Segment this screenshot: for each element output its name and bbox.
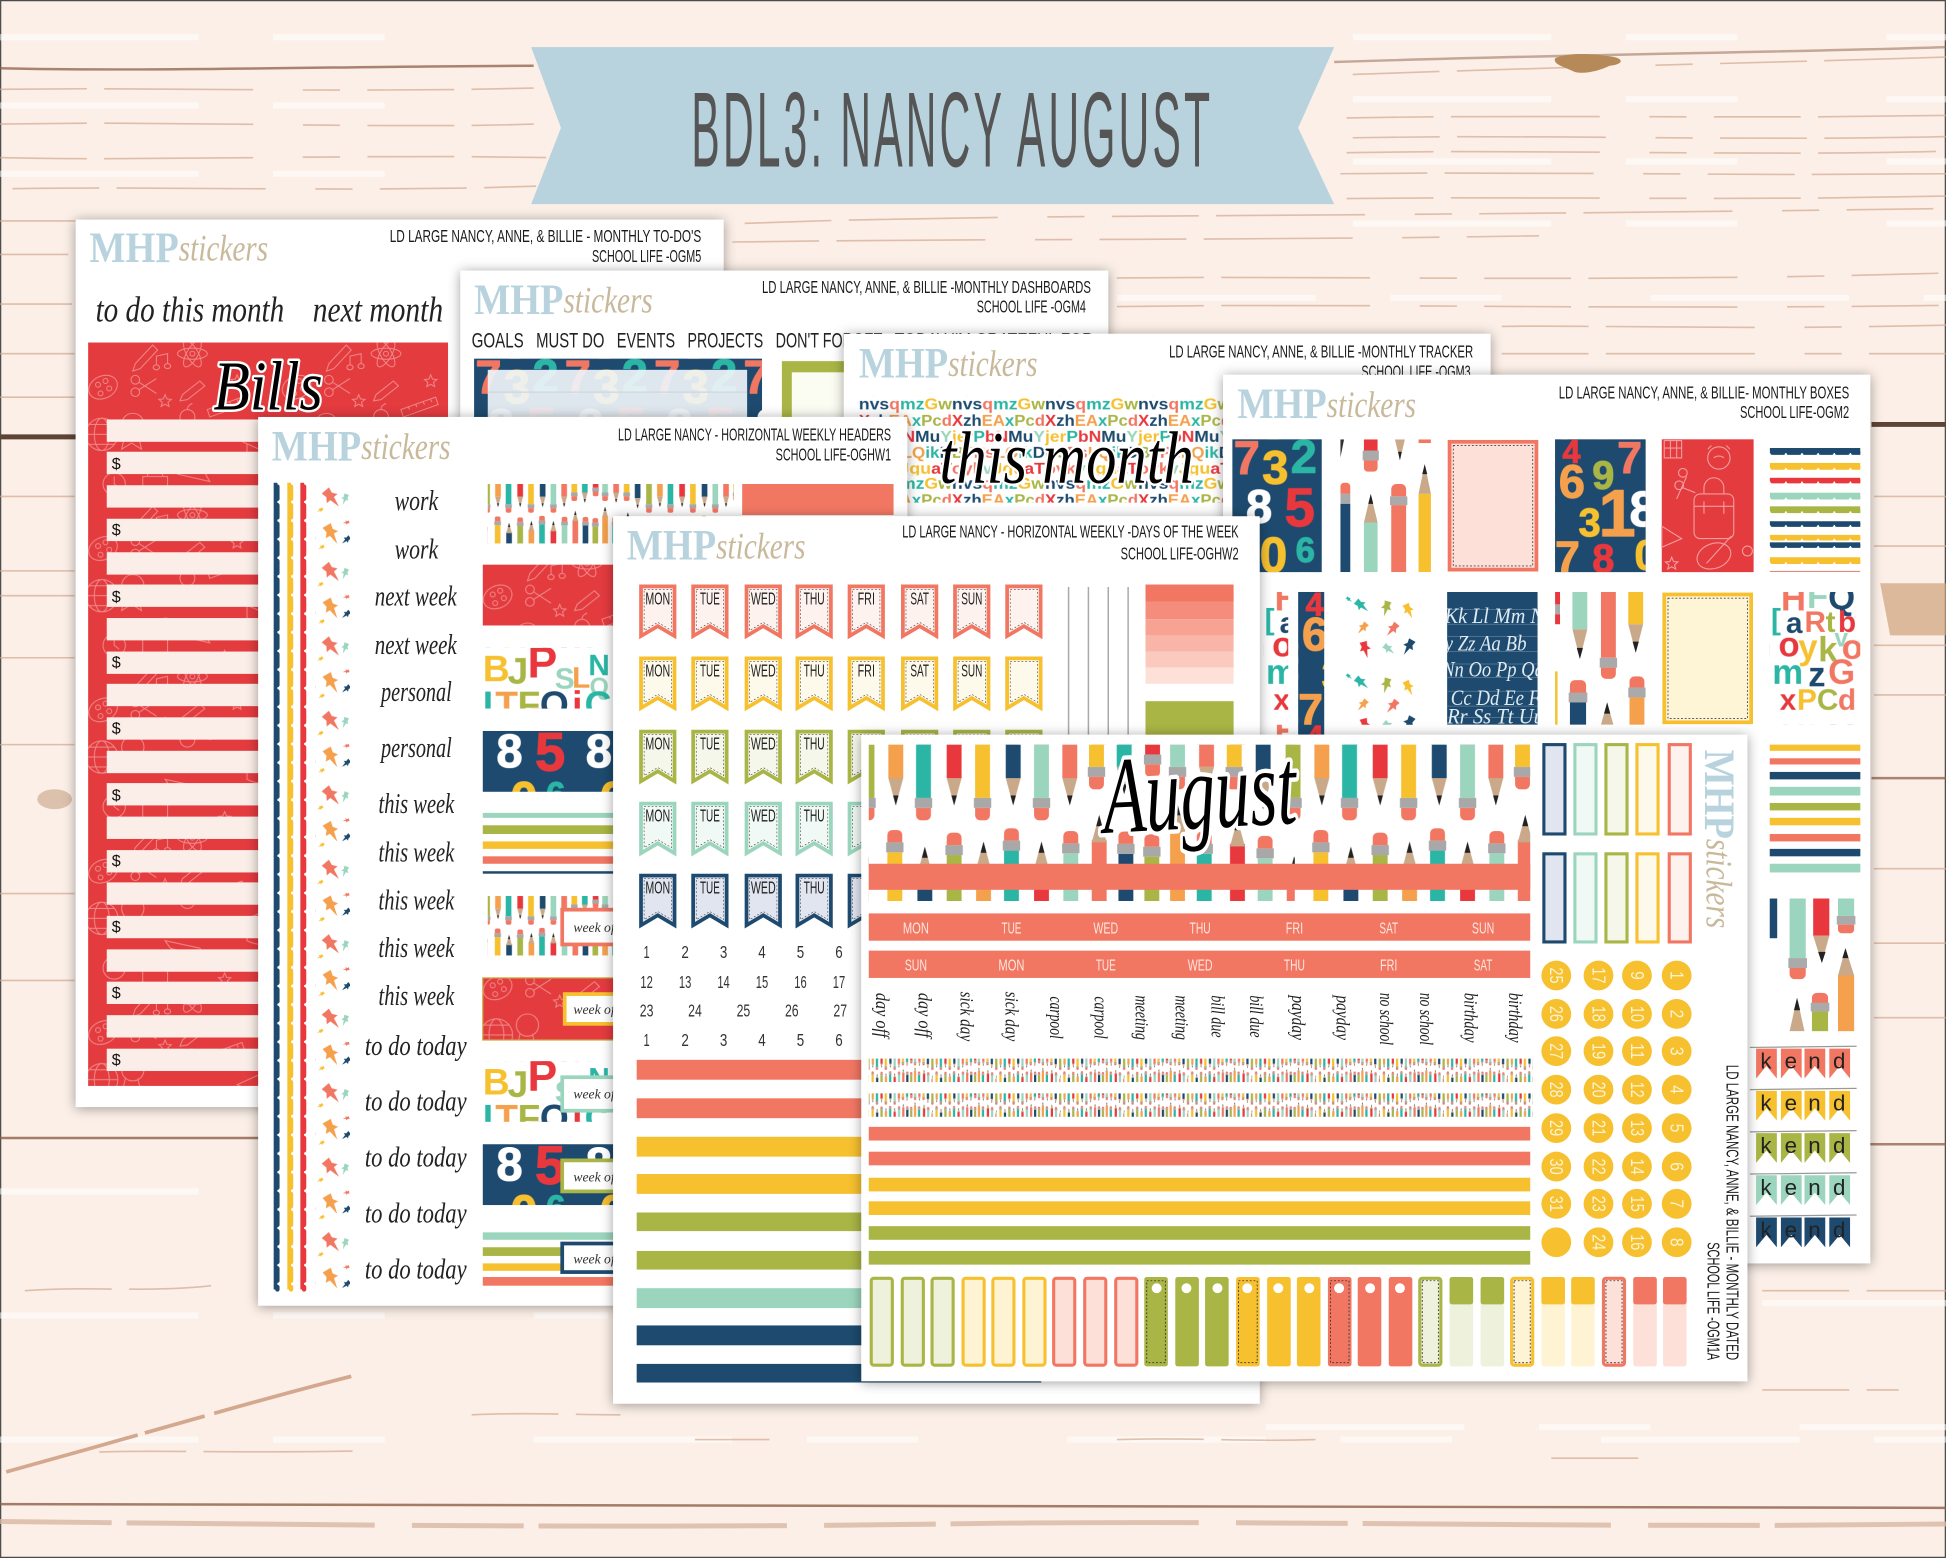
sheet: monthly dashboards: GOALS: [472, 329, 524, 352]
day flags coral row: WED: [751, 588, 776, 608]
date dots: 29: [1546, 1120, 1567, 1136]
date dots: 9: [1627, 971, 1648, 980]
rotated script words: birthday: [1459, 993, 1480, 1043]
day flags coral row: FRI: [858, 588, 875, 608]
script word stickers: to do today: [365, 1254, 467, 1285]
weekday bar monday start: WED: [1093, 919, 1118, 937]
weekend banners: e: [1785, 1175, 1797, 1200]
script word stickers: this week: [379, 789, 455, 820]
day flags navy row: THU: [804, 878, 825, 898]
date numbers: 15: [756, 972, 768, 992]
date numbers: 25: [737, 1000, 750, 1020]
pencil banner: [869, 745, 1530, 901]
day flags navy row: MON: [645, 878, 670, 898]
tile: navy numbers: [1232, 439, 1322, 572]
tile: alphabet strip and navy numbers strip: [1263, 592, 1324, 735]
script word stickers: next week: [375, 630, 458, 661]
pencil header with week-of label: [488, 896, 625, 955]
sheet: days of the week: LD LARGE NANCY - HORIZONTAL WEEKLY -DAYS OF THE WEEK: [902, 521, 1239, 541]
weekend banners: n: [1808, 1175, 1821, 1200]
sheet: monthly dashboards: stickers: [563, 281, 653, 322]
script word stickers: this week: [379, 886, 455, 917]
sheet: monthly tracker: [844, 334, 1491, 532]
sheet: days of the week: MHP: [627, 522, 716, 570]
weekday bar sunday start: THU: [1284, 956, 1305, 974]
weekend banners: k: [1760, 1049, 1772, 1074]
alphabet header with week-of label: week of: [573, 1086, 617, 1101]
sheet: monthly dashboards: LD LARGE NANCY, ANNE, & BILLIE -MONTHLY DASHBOARDS: [762, 277, 1091, 297]
date dots: 19: [1588, 1043, 1609, 1059]
date dots: 10: [1627, 1006, 1648, 1022]
rotated script words: no school: [1415, 993, 1436, 1045]
sheet: monthly boxes: stickers: [1327, 385, 1416, 426]
day flags coral row: MON: [645, 588, 670, 608]
date numbers: 2: [681, 942, 689, 962]
stripes header: [483, 813, 619, 874]
weekday bar sunday start: TUE: [1096, 956, 1116, 974]
sheet: monthly tracker: SCHOOL LIFE -OGM3: [1361, 361, 1471, 381]
sheet: weekly headers: [258, 417, 907, 1306]
date numbers: 4: [758, 942, 766, 962]
day flags yellow row: [641, 658, 1041, 708]
title ribbon banner: [531, 47, 1334, 204]
title text: BDL3: NANCY AUGUST: [691, 70, 1210, 190]
date dots: 3: [1666, 1047, 1687, 1056]
weekend banners: e: [1785, 1091, 1797, 1116]
mini pencil washi strips: [869, 1059, 1533, 1117]
date dots: 22: [1588, 1159, 1609, 1175]
script word stickers: personal: [380, 677, 452, 708]
script word stickers: this week: [379, 981, 455, 1012]
weekday bar sunday start: WED: [1188, 956, 1213, 974]
rotated script words: sick day: [1000, 992, 1021, 1042]
tile: pencils two: [1555, 592, 1646, 725]
month script: August: [1096, 726, 1301, 857]
sheet: monthly tracker: MHP: [859, 339, 948, 387]
weekday bar monday start: SUN: [1472, 919, 1494, 937]
sheet: monthly to-do's: $: [112, 455, 121, 473]
day flags olive row: THU: [804, 734, 825, 754]
colour stripes: [869, 1127, 1530, 1265]
date numbers: 6: [835, 1030, 843, 1050]
sheet: monthly to-do's: $: [112, 719, 121, 737]
day flags navy row: [641, 876, 883, 925]
weekend banners: n: [1808, 1217, 1821, 1242]
day flags coral row: THU: [804, 588, 825, 608]
weekend banners: n: [1808, 1091, 1821, 1116]
sheet: monthly tracker: LD LARGE NANCY, ANNE, & BILLIE -MONTHLY TRACKER: [1169, 341, 1473, 361]
weekend banners: k: [1760, 1133, 1772, 1158]
date dots: 2: [1666, 1010, 1687, 1018]
wide stripes: [637, 1060, 1041, 1383]
script word stickers: work: [395, 534, 439, 565]
date numbers: 26: [785, 1000, 799, 1020]
date dots: 26: [1546, 1006, 1567, 1022]
push pin strip: [315, 483, 350, 1289]
date numbers: 1: [644, 942, 650, 962]
weekend banners: d: [1833, 1091, 1845, 1116]
rotated logo: [1695, 750, 1743, 928]
alphabet header with week-of label: [483, 1061, 624, 1122]
rotated script words: day off: [913, 993, 934, 1040]
script word stickers: personal: [380, 733, 452, 764]
date numbers: 13: [679, 972, 691, 992]
date dots: 30: [1546, 1159, 1567, 1175]
sheet: weekly headers: SCHOOL LIFE-OGHW1: [776, 444, 891, 464]
rotated sheet title: [1704, 1065, 1742, 1360]
date dots: 18: [1588, 1006, 1609, 1022]
weekday bar monday start: SAT: [1379, 919, 1398, 937]
rotated logo: stickers: [1697, 839, 1738, 928]
sheet: monthly to-do's: $: [112, 984, 121, 1002]
rotated script words: [871, 992, 1525, 1045]
rotated script words: birthday: [1504, 993, 1525, 1043]
rotated script words: payday: [1287, 994, 1308, 1041]
weekend banners: d: [1833, 1175, 1845, 1200]
date dots: 16: [1627, 1234, 1648, 1250]
date dots: 1: [1666, 971, 1687, 980]
tile: cursive on navy: [1441, 592, 1545, 729]
weekend banners: e: [1785, 1217, 1797, 1242]
rotated script words: meeting: [1170, 995, 1191, 1040]
sheet: monthly to-do's: SCHOOL LIFE -OGM5: [592, 246, 701, 266]
sheet: monthly dashboards: PROJECTS: [688, 329, 763, 352]
weekday bar monday start: THU: [1190, 919, 1211, 937]
coral header: [742, 484, 894, 515]
date dots: 23: [1588, 1196, 1609, 1212]
script word stickers: work: [395, 486, 439, 517]
red header with week-of label: [483, 978, 627, 1040]
day flags olive row: TUE: [700, 734, 720, 754]
script word stickers: to do today: [365, 1198, 467, 1229]
sheet: monthly dashboards: MUST DO: [536, 329, 604, 352]
date numbers: 23: [640, 1000, 653, 1020]
stripes stack: [1770, 745, 1860, 872]
day flags yellow row: SUN: [961, 660, 982, 680]
date dots: 5: [1666, 1124, 1687, 1132]
tile: navy numbers two: [1555, 439, 1646, 572]
weekday bar monday start: FRI: [1286, 919, 1303, 937]
date dots: 12: [1627, 1082, 1648, 1098]
sheet: monthly tracker: this month: [939, 418, 1194, 500]
navy header with week-of label: week of: [573, 1169, 617, 1184]
coral title bar: [869, 864, 1530, 890]
sheet: monthly dashboards: EVENTS: [617, 329, 675, 352]
bottom box stickers: [871, 1277, 1687, 1366]
weekend banners: n: [1808, 1049, 1821, 1074]
weekend banners: e: [1785, 1133, 1797, 1158]
navy header with week-of label: [483, 1144, 624, 1205]
sheet: monthly boxes: [1223, 375, 1870, 1263]
sheet: monthly to-do's: $: [112, 852, 121, 870]
sheet: days of the week: [613, 516, 1260, 1404]
sheet: monthly to-do's: [76, 220, 724, 1107]
weekend banners: k: [1760, 1091, 1772, 1116]
date numbers: 6: [835, 942, 843, 962]
day flags coral row: TUE: [700, 588, 720, 608]
rotated script words: carpool: [1090, 997, 1111, 1039]
date numbers: 5: [797, 942, 804, 962]
tile: push pins: [1340, 592, 1431, 725]
sheet: weekly headers: stickers: [361, 427, 451, 468]
weekend banners: k: [1760, 1175, 1772, 1200]
rotated script words: sick day: [956, 992, 977, 1042]
sheet: monthly to-do's: to do this month: [96, 289, 284, 329]
sheet: weekly headers: MHP: [272, 422, 361, 470]
day flags navy row: WED: [751, 878, 776, 898]
tile: coral frame: [1450, 442, 1536, 570]
date numbers: 16: [794, 972, 807, 992]
date dots: 17: [1588, 967, 1609, 984]
date dots: 21: [1588, 1120, 1609, 1136]
weekday bar monday start: TUE: [1002, 919, 1022, 937]
script word stickers: next week: [375, 582, 458, 613]
day flags mint row: [641, 804, 883, 853]
date dots: 27: [1546, 1043, 1567, 1059]
script word stickers: to do today: [365, 1143, 467, 1174]
date dots: 14: [1627, 1159, 1648, 1175]
date numbers: [640, 942, 847, 1050]
sheet: monthly to-do's: next month: [313, 289, 443, 329]
day flags navy row: TUE: [700, 878, 720, 898]
day flags coral row: SUN: [961, 588, 982, 608]
weekday bar sunday start: FRI: [1380, 956, 1397, 974]
sheet: monthly to-do's: $: [112, 918, 121, 936]
stripes header with week-of label: [483, 1232, 624, 1286]
weekday bar monday start: [869, 913, 1530, 941]
sheet: monthly dashboards: TODAY I'M GRATEFUL FOR: [895, 329, 1093, 352]
date numbers: 1: [644, 1030, 650, 1050]
stripes header with week-of label: week of: [573, 1251, 617, 1266]
date dots: 4: [1666, 1085, 1687, 1094]
date numbers: 5: [797, 1030, 804, 1050]
tile: scallop stripes: [1770, 448, 1860, 572]
date dots: 20: [1588, 1082, 1609, 1098]
day flags yellow row: MON: [645, 660, 670, 680]
day flags yellow row: FRI: [858, 660, 875, 680]
rotated script words: payday: [1332, 994, 1353, 1041]
pencils small tile: [1770, 898, 1856, 1032]
date dots: 24: [1588, 1234, 1609, 1250]
date dots: 28: [1546, 1082, 1567, 1098]
day flags mint row: WED: [751, 806, 776, 826]
date dots: 6: [1666, 1162, 1687, 1171]
date dots: 15: [1627, 1196, 1648, 1212]
date numbers: 12: [640, 972, 653, 992]
red header: [483, 565, 619, 625]
rotated script words: day off: [871, 993, 892, 1040]
tile: cursive on navy: y Zz Aa Bb: [1443, 630, 1527, 655]
weekday bar sunday start: MON: [998, 956, 1025, 974]
olive block: [1146, 701, 1234, 738]
tile: large pencils: [1340, 439, 1431, 572]
date dots: 8: [1666, 1238, 1687, 1247]
sheet: monthly to-do's: $: [112, 521, 121, 539]
day flags mint row: TUE: [700, 806, 720, 826]
weekend banners: d: [1833, 1133, 1845, 1158]
date numbers: 3: [720, 942, 727, 962]
date numbers: 17: [833, 972, 845, 992]
weekday bar monday start: MON: [903, 919, 929, 937]
day flags yellow row: WED: [751, 660, 776, 680]
day flags coral row: SAT: [910, 588, 929, 608]
sheet: monthly boxes: MHP: [1237, 380, 1327, 428]
date dots: [1541, 961, 1692, 1257]
tile: alphabet: [1770, 592, 1860, 725]
sheet: monthly to-do's: Bills: [213, 349, 323, 426]
day flags mint row: THU: [804, 806, 825, 826]
sheet: days of the week: stickers: [716, 526, 805, 567]
rotated sheet title: SCHOOL LIFE -OGM1A: [1704, 1242, 1724, 1360]
weekend banners: d: [1833, 1217, 1845, 1242]
date dots: 11: [1627, 1043, 1648, 1059]
sheet: monthly dated: [861, 726, 1747, 1381]
date numbers: 4: [758, 1030, 766, 1050]
script word stickers: to do today: [365, 1031, 467, 1062]
sheet: weekly headers: LD LARGE NANCY - HORIZONTAL WEEKLY HEADERS: [618, 425, 891, 445]
date numbers: 14: [717, 972, 730, 992]
day flags yellow row: THU: [804, 660, 825, 680]
day flags coral row: [641, 586, 1041, 636]
day flags olive row: [641, 732, 1041, 781]
rotated script words: bill due: [1206, 995, 1227, 1038]
sheet: monthly tracker: stickers: [948, 344, 1038, 385]
sheet: monthly dashboards: DON'T FORGET: [776, 329, 882, 352]
vertical grey lines: [1069, 587, 1128, 735]
sheet: monthly to-do's: $: [112, 654, 121, 672]
date numbers: 24: [688, 1000, 702, 1020]
tile: red doodles: [1662, 439, 1754, 574]
sheet: monthly dashboards: SCHOOL LIFE -OGM4: [977, 297, 1086, 317]
pencil header: [488, 484, 734, 543]
scalloped borders: [274, 483, 304, 1289]
rotated script words: no school: [1375, 993, 1396, 1045]
weekend banners: e: [1785, 1049, 1797, 1074]
alphabet header: [483, 648, 619, 709]
script word stickers: this week: [379, 837, 455, 868]
date dots: 31: [1546, 1196, 1567, 1212]
weekend banners: k: [1760, 1217, 1772, 1242]
coral gradient block: [1146, 585, 1234, 684]
script word stickers: this week: [379, 933, 455, 964]
date numbers: 2: [681, 1030, 689, 1050]
sheet: monthly dashboards: [460, 271, 1108, 767]
day flags yellow row: TUE: [700, 660, 720, 680]
day flags yellow row: SAT: [910, 660, 929, 680]
sheet: monthly boxes: SCHOOL LIFE-OGM2: [1740, 402, 1849, 422]
rotated script words: bill due: [1245, 995, 1266, 1038]
day flags olive row: WED: [751, 734, 776, 754]
weekday bar sunday start: SUN: [905, 956, 927, 974]
sheet: monthly dashboards: MHP: [474, 276, 563, 324]
red header with week-of label: week of: [573, 1002, 617, 1017]
weekday bar sunday start: SAT: [1474, 956, 1492, 974]
sheet: monthly to-do's: $: [112, 1051, 121, 1069]
rotated script words: carpool: [1045, 997, 1066, 1039]
sheet: days of the week: SCHOOL LIFE-OGHW2: [1121, 544, 1239, 564]
pencil header with week-of label: week of: [573, 920, 617, 935]
weekday bar sunday start: [869, 951, 1530, 978]
script word stickers: [365, 486, 467, 1285]
tile: yellow frame: [1664, 594, 1751, 722]
date dots: 25: [1546, 967, 1567, 984]
date dots: 7: [1666, 1199, 1687, 1208]
day flags olive row: MON: [645, 734, 670, 754]
weekend banners: d: [1833, 1049, 1845, 1074]
sheet: monthly to-do's: stickers: [179, 229, 268, 270]
sheet: monthly to-do's: $: [112, 786, 121, 804]
weekend banners: n: [1808, 1133, 1821, 1158]
sheet: monthly to-do's: $: [112, 588, 121, 606]
rotated logo: MHP: [1695, 750, 1743, 839]
weekend banners: [1750, 1046, 1857, 1247]
date numbers: 27: [833, 1000, 847, 1020]
date numbers: 3: [720, 1030, 727, 1050]
rotated script words: meeting: [1131, 995, 1152, 1040]
navy numbers header: [483, 731, 619, 792]
date dots: 13: [1627, 1120, 1648, 1136]
outlined vertical boxes: [1544, 745, 1690, 942]
rotated sheet title: LD LARGE NANCY, ANNE, & BILLIE - MONTHLY DATED: [1722, 1065, 1742, 1360]
sheet: monthly to-do's: LD LARGE NANCY, ANNE, & BILLIE - MONTHLY TO-DO'S: [390, 226, 701, 246]
script word stickers: to do today: [365, 1087, 467, 1118]
day flags mint row: MON: [645, 806, 670, 826]
sheet: monthly to-do's: MHP: [89, 224, 179, 272]
